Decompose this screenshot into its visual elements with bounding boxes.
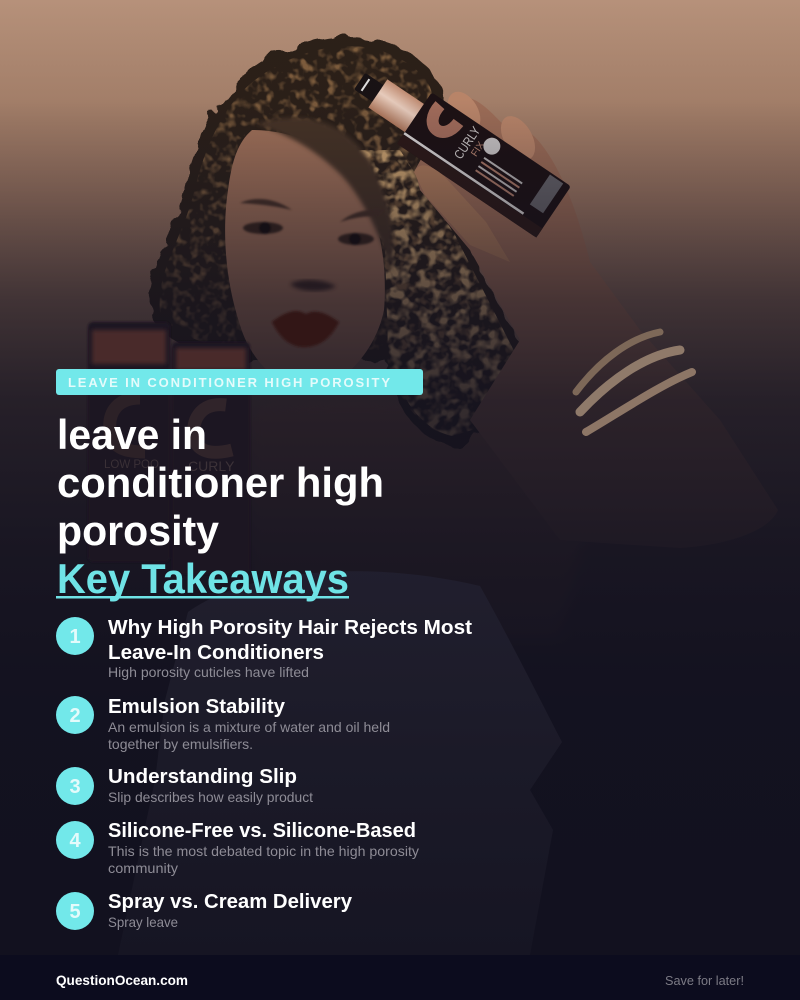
thumb over bottle (414, 165, 510, 262)
takeaway 3: Slip describes how easily product (108, 789, 313, 805)
takeaway 1: High porosity cuticles have lifted (108, 664, 309, 680)
nose shadow (290, 280, 336, 291)
shoulders and chest (250, 401, 590, 640)
takeaway 5: Spray leave (108, 914, 178, 930)
hair (150, 37, 545, 446)
product bottle (342, 55, 571, 238)
topic tag (56, 369, 423, 395)
takeaway 5: Spray vs. Cream Delivery (108, 891, 353, 913)
product bottle: FIX (469, 140, 487, 159)
takeaway 2: 2 (69, 705, 81, 727)
takeaway 2: Emulsion Stability (108, 696, 286, 718)
takeaway 4: 4 (69, 830, 81, 852)
takeaway 2 (56, 696, 390, 752)
arm and hand (415, 97, 778, 548)
forehead hair fringe (256, 118, 393, 272)
takeaway 1: Leave-In Conditioners (108, 642, 324, 664)
takeaway 3 (56, 766, 313, 805)
fingers behind bottle (441, 86, 542, 166)
paisley bands (92, 330, 166, 364)
takeaway 4: This is the most debated topic in the high porosity (108, 843, 419, 859)
bottle label curly: CURLY (188, 458, 235, 474)
takeaway 2: An emulsion is a mixture of water and oil held (108, 719, 390, 735)
title (57, 411, 384, 554)
takeaway 1 (56, 617, 472, 680)
title: leave in (57, 411, 207, 458)
photo: woman with hair product (150, 37, 778, 640)
takeaway 4: Silicone-Free vs. Silicone-Based (108, 820, 416, 842)
face (225, 118, 393, 392)
lips (272, 311, 339, 347)
footer save note: Save for later! (665, 973, 744, 988)
takeaway 5 (56, 891, 353, 930)
takeaway 3: 3 (69, 776, 81, 798)
bottle C logos (110, 398, 145, 452)
takeaway 1: Why High Porosity Hair Rejects Most (108, 617, 472, 639)
title: conditioner high (57, 459, 384, 506)
product bottle: CURLY (451, 123, 483, 162)
takeaway 2: together by emulsifiers. (108, 736, 253, 752)
topic tag: LEAVE IN CONDITIONER HIGH POROSITY (68, 375, 390, 390)
left eye (240, 199, 292, 234)
takeaway 5: 5 (69, 901, 81, 923)
takeaway 4: community (108, 860, 178, 876)
key takeaways heading: Key Takeaways (57, 555, 349, 602)
right eye (338, 210, 384, 245)
title: porosity (57, 507, 220, 554)
takeaway 3: Understanding Slip (108, 766, 297, 788)
takeaway 1: 1 (69, 626, 81, 648)
dress (118, 571, 562, 955)
footer brand: QuestionOcean.com (56, 972, 188, 988)
background product bottles (88, 322, 250, 574)
bottle label low poo: LOW POO (104, 459, 159, 471)
takeaway 4 (56, 820, 419, 876)
footer bar (0, 955, 800, 1000)
bracelets (576, 332, 692, 432)
